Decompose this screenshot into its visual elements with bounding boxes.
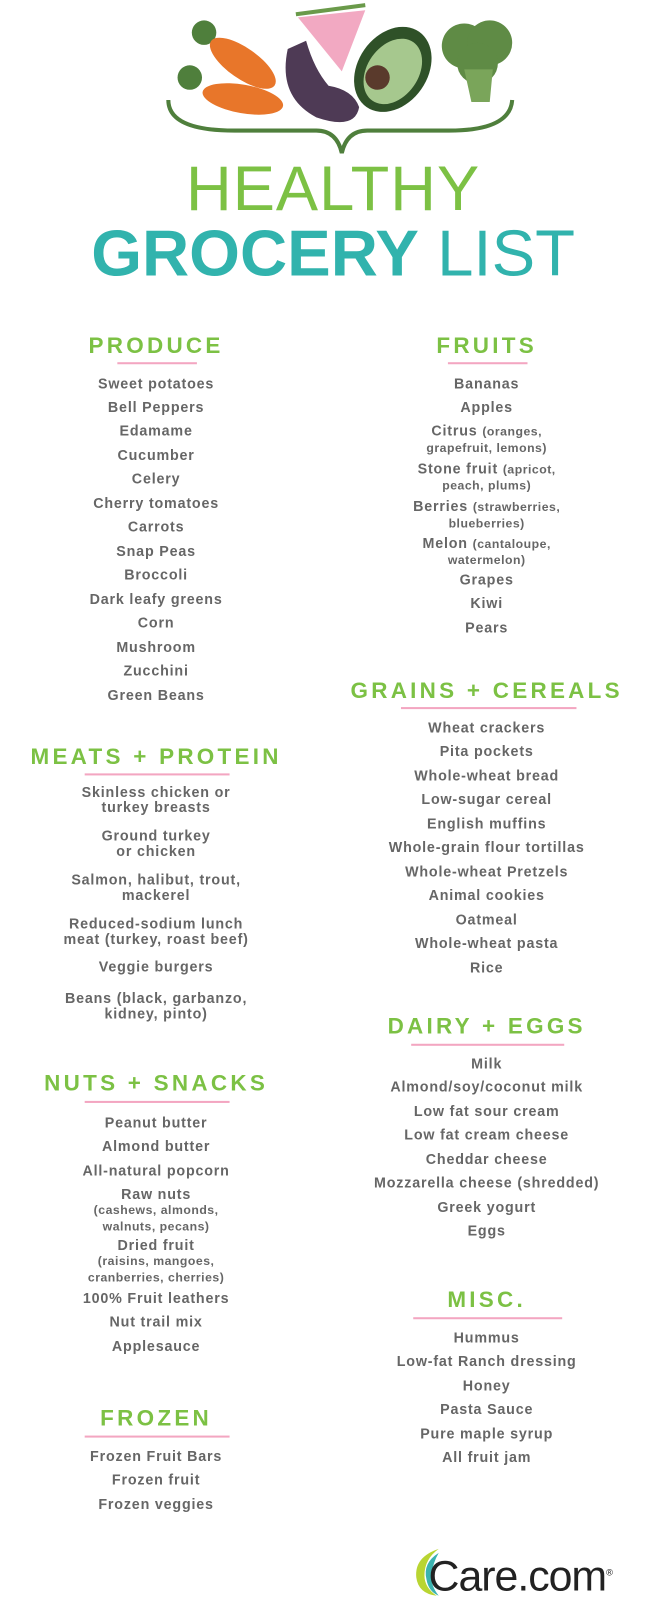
panel: grains: Oatmeal — [456, 911, 518, 927]
panel: grains: Pita pockets — [440, 743, 534, 759]
panel: produce: Cherry tomatoes — [93, 495, 219, 511]
panel: grains: GRAINS + CEREALS — [350, 677, 623, 703]
panel: frozen: Frozen veggies — [98, 1496, 214, 1512]
logo: Care.com: Care.com® — [429, 1552, 612, 1600]
panel: frozen: Frozen fruit — [112, 1471, 200, 1488]
title — [91, 154, 575, 290]
panel: produce: Carrots — [128, 518, 184, 535]
panel: meats: or chicken — [116, 843, 196, 859]
panel: fruits — [413, 333, 560, 636]
panel: dairy: Cheddar cheese — [426, 1151, 548, 1167]
panel: nuts — [44, 1070, 268, 1354]
panel: grains: Rice — [470, 959, 503, 975]
panel: nuts: Nut trail mix — [110, 1313, 203, 1329]
panel: dairy: Milk — [471, 1055, 502, 1071]
panel: grains: Whole-grain flour tortillas — [389, 839, 585, 855]
panel: meats: Reduced-sodium lunch — [69, 915, 243, 932]
panel: fruits: peach, plums) — [442, 479, 531, 493]
panel: meats: Ground turkey — [102, 827, 211, 844]
panel: misc: All fruit jam — [442, 1449, 531, 1465]
panel: nuts: Dried fruit — [117, 1237, 195, 1253]
panel: misc: Pasta Sauce — [440, 1401, 533, 1417]
icon: carrots — [178, 20, 286, 120]
decorative swash — [168, 100, 512, 153]
panel: dairy: Almond/soy/coconut milk — [390, 1078, 583, 1095]
panel: nuts: All-natural popcorn — [82, 1162, 230, 1178]
panel: produce: PRODUCE — [89, 333, 224, 358]
panel: meats: kidney, pinto) — [104, 1005, 208, 1021]
panel: meats: turkey breasts — [102, 799, 211, 815]
panel: fruits: Bananas — [454, 375, 519, 392]
panel: dairy: Low fat cream cheese — [404, 1126, 569, 1143]
panel: produce: Cucumber — [118, 447, 195, 463]
panel: grains: Animal cookies — [429, 887, 545, 903]
panel: dairy: Low fat sour cream — [414, 1103, 560, 1119]
panel: produce: Celery — [132, 470, 180, 487]
panel: produce — [89, 333, 224, 703]
panel: nuts: Almond butter — [102, 1138, 210, 1154]
panel: produce: Mushroom — [116, 639, 196, 655]
panel: nuts: cranberries, cherries) — [88, 1270, 224, 1285]
panel: grains — [350, 677, 623, 975]
panel: misc: Honey — [463, 1377, 511, 1394]
panel: misc: MISC. — [447, 1287, 526, 1312]
panel: fruits: blueberries) — [449, 516, 525, 531]
panel: nuts: (raisins, mangoes, — [98, 1254, 214, 1268]
panel: produce: Snap Peas — [116, 543, 196, 559]
icon: eggplant — [286, 41, 359, 122]
panel: dairy: Eggs — [468, 1222, 506, 1239]
panel: meats: Veggie burgers — [99, 958, 213, 974]
panel: produce: Bell Peppers — [108, 399, 204, 415]
panel: fruits: watermelon) — [448, 553, 526, 567]
panel: fruits: Berries (strawberries, — [413, 498, 560, 514]
panel: fruits: Pears — [465, 619, 508, 636]
panel: fruits: Melon (cantaloupe, — [422, 535, 551, 551]
panel: grains: Whole-wheat pasta — [415, 935, 558, 951]
panel: produce: Sweet potatoes — [98, 375, 214, 392]
panel: dairy: Greek yogurt — [437, 1199, 536, 1215]
panel: dairy: Mozzarella cheese (shredded) — [374, 1174, 599, 1191]
panel: nuts: Applesauce — [112, 1338, 200, 1354]
panel: nuts: Peanut butter — [105, 1114, 207, 1130]
panel: grains: Whole-wheat Pretzels — [405, 863, 568, 879]
panel: produce: Zucchini — [123, 662, 189, 678]
panel: misc — [397, 1287, 577, 1465]
panel: frozen: FROZEN — [100, 1405, 212, 1430]
panel: produce: Corn — [138, 614, 174, 631]
title: HEALTHY — [186, 154, 480, 224]
panel: meats: mackerel — [122, 887, 190, 903]
panel: fruits: Grapes — [460, 571, 514, 588]
panel: meats: Skinless chicken or — [82, 784, 231, 800]
panel: misc: Hummus — [454, 1329, 520, 1346]
panel: produce: Dark leafy greens — [90, 591, 223, 607]
panel: dairy — [374, 1013, 599, 1239]
panel: frozen: Frozen Fruit Bars — [90, 1448, 222, 1464]
panel: frozen — [84, 1405, 230, 1512]
icon: broccoli — [442, 20, 512, 102]
panel: produce: Green Beans — [108, 687, 205, 703]
panel: misc: Pure maple syrup — [420, 1425, 553, 1442]
panel: grains: Wheat crackers — [428, 719, 545, 736]
panel: meats: meat (turkey, roast beef) — [63, 931, 249, 947]
panel: nuts: 100% Fruit leathers — [83, 1290, 229, 1306]
panel: produce: Edamame — [120, 422, 193, 439]
panel: fruits: grapefruit, lemons) — [426, 441, 547, 455]
panel: produce: Broccoli — [124, 566, 188, 583]
panel: fruits: Citrus (oranges, — [431, 422, 542, 439]
panel: meats: Beans (black, garbanzo, — [65, 990, 247, 1006]
panel: meats: MEATS + PROTEIN — [30, 744, 282, 769]
panel: meats — [30, 744, 282, 1022]
icon: watermelon — [296, 5, 365, 71]
panel: nuts: Raw nuts — [121, 1186, 191, 1202]
header illustration — [166, 3, 514, 154]
panel: dairy: DAIRY + EGGS — [388, 1013, 586, 1039]
icon: avocado — [338, 12, 448, 127]
panel: grains: Low-sugar cereal — [421, 791, 552, 807]
title: GROCERY LIST — [91, 216, 575, 290]
panel: nuts: walnuts, pecans) — [103, 1219, 210, 1234]
panel: grains: English muffins — [427, 815, 546, 832]
panel: fruits: Kiwi — [470, 595, 503, 611]
panel: misc: Low-fat Ranch dressing — [397, 1353, 577, 1369]
panel: meats: Salmon, halibut, trout, — [71, 871, 241, 888]
panel: grains: Whole-wheat bread — [414, 767, 559, 784]
panel: fruits: Apples — [460, 399, 513, 415]
panel: nuts: (cashews, almonds, — [94, 1203, 219, 1217]
panel: nuts: NUTS + SNACKS — [44, 1070, 268, 1096]
panel: fruits: FRUITS — [436, 333, 537, 358]
panel: fruits: Stone fruit (apricot, — [418, 460, 556, 476]
